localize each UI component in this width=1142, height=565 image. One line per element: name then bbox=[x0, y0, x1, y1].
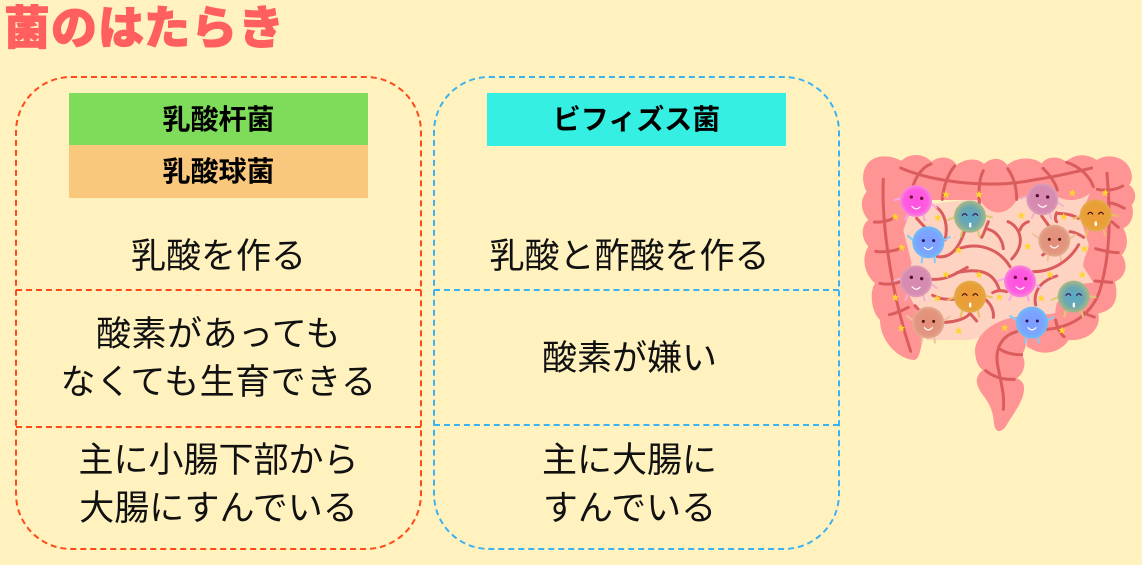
text: habitat: すんでいる bbox=[543, 489, 716, 528]
bacterium: salmon bbox=[1033, 225, 1076, 261]
bacterium: salmon bbox=[907, 307, 950, 343]
label: 乳酸杆菌 bbox=[69, 93, 368, 146]
label: 乳酸球菌: 乳酸球菌 bbox=[162, 156, 274, 187]
label: ビフィズス菌: ビフィズス菌 bbox=[553, 104, 720, 135]
panel outline: red dashed bbox=[15, 76, 422, 550]
text: makes lactic and acetic acid: 乳酸と酢酸を作る bbox=[489, 237, 770, 276]
title: 菌のはたらき bbox=[4, 2, 285, 54]
bacterium: orange bbox=[1074, 199, 1118, 235]
text: habitat: 主に大腸に bbox=[542, 441, 717, 480]
panel outline: blue dashed bbox=[433, 76, 840, 550]
label: 乳酸球菌 bbox=[69, 145, 368, 198]
text: oxygen tolerance: なくても生育できる bbox=[60, 363, 376, 402]
panel: bifidobacteria bbox=[433, 76, 840, 550]
text: habitat bbox=[78, 441, 358, 528]
text: makes lactic acid: 乳酸を作る bbox=[131, 237, 306, 276]
text: habitat: 主に小腸下部から bbox=[78, 441, 358, 480]
inner belly bbox=[903, 187, 1097, 340]
illustration: intestines with bacteria bbox=[862, 155, 1136, 431]
text: oxygen tolerance bbox=[60, 315, 376, 402]
bacterium: magenta bbox=[998, 265, 1041, 301]
bacterium: blue bbox=[1010, 307, 1053, 343]
colon fold lines and blood vessels bbox=[874, 162, 1124, 409]
panel: lactic acid bacteria bbox=[15, 76, 422, 550]
text: habitat bbox=[542, 441, 717, 528]
bacterium: blue bbox=[908, 226, 950, 262]
label: 乳酸杆菌: 乳酸杆菌 bbox=[162, 104, 274, 135]
bacterium: teal bbox=[948, 201, 992, 237]
stars bbox=[892, 189, 1109, 335]
bacteria bbox=[894, 183, 1118, 343]
bacterium: mauve bbox=[894, 265, 937, 301]
colon bbox=[862, 155, 1135, 431]
bacterium: mauve bbox=[1021, 183, 1063, 219]
text: oxygen tolerance: 酸素があっても bbox=[96, 315, 341, 354]
text: habitat: 大腸にすんでいる bbox=[79, 489, 358, 528]
bacterium: magenta bbox=[894, 185, 937, 220]
text: dislikes oxygen: 酸素が嫌い bbox=[542, 339, 717, 378]
bacterium: orange bbox=[948, 281, 992, 317]
label: ビフィズス菌 bbox=[487, 93, 786, 146]
bacterium: teal bbox=[1052, 281, 1096, 317]
